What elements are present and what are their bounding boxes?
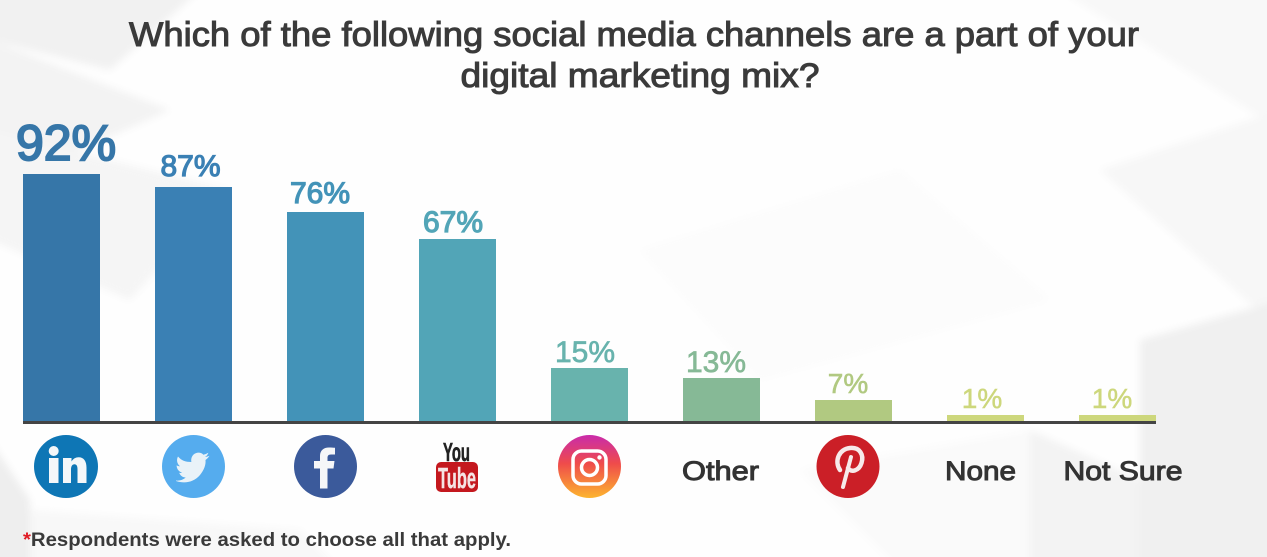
title: Which of the following social media channels are a part of your: [129, 16, 1139, 54]
bar: Pinterest 7%: 7%: [828, 368, 868, 399]
icon: LinkedIn: [34, 435, 98, 498]
bar: LinkedIn 92%: [16, 115, 116, 422]
icon: Instagram: [558, 435, 621, 498]
bar: Pinterest 7%: [815, 368, 892, 422]
icon: YouTube: [436, 437, 478, 495]
bar: LinkedIn 92%: 92%: [16, 115, 116, 171]
bar: Facebook 76%: 76%: [290, 177, 350, 210]
bar: None 1%: 1%: [962, 383, 1002, 414]
bar chart: [16, 115, 1156, 422]
icon: YouTube: Tube: [438, 463, 476, 495]
bar: Not Sure 1%: 1%: [1092, 383, 1132, 414]
icon: Pinterest: [816, 435, 880, 498]
icon: YouTube: You: [443, 437, 470, 467]
bar: Other 13%: [683, 346, 760, 422]
bar: Other 13%: 13%: [686, 346, 746, 379]
icon: Twitter: [162, 435, 225, 498]
bar: Instagram 15%: [551, 336, 628, 422]
axis line: [23, 421, 1156, 424]
bar: YouTube 67%: [419, 206, 496, 422]
footnote: *Respondents were asked to choose all that apply.: [23, 529, 511, 551]
bar: Twitter 87%: [155, 150, 232, 422]
bar: Not Sure 1%: [1079, 383, 1156, 422]
bar: Instagram 15%: 15%: [555, 336, 615, 369]
bar: YouTube 67%: 67%: [423, 206, 483, 239]
bar: Facebook 76%: [287, 177, 364, 422]
bar: Twitter 87%: 87%: [160, 150, 221, 183]
label: Other: Other: [682, 456, 759, 486]
icon: Facebook: [294, 435, 357, 498]
title second line: digital marketing mix?: [460, 57, 820, 95]
label: Not Sure: Not Sure: [1064, 456, 1182, 486]
bar: None 1%: [947, 383, 1024, 422]
label: None: None: [945, 456, 1016, 486]
